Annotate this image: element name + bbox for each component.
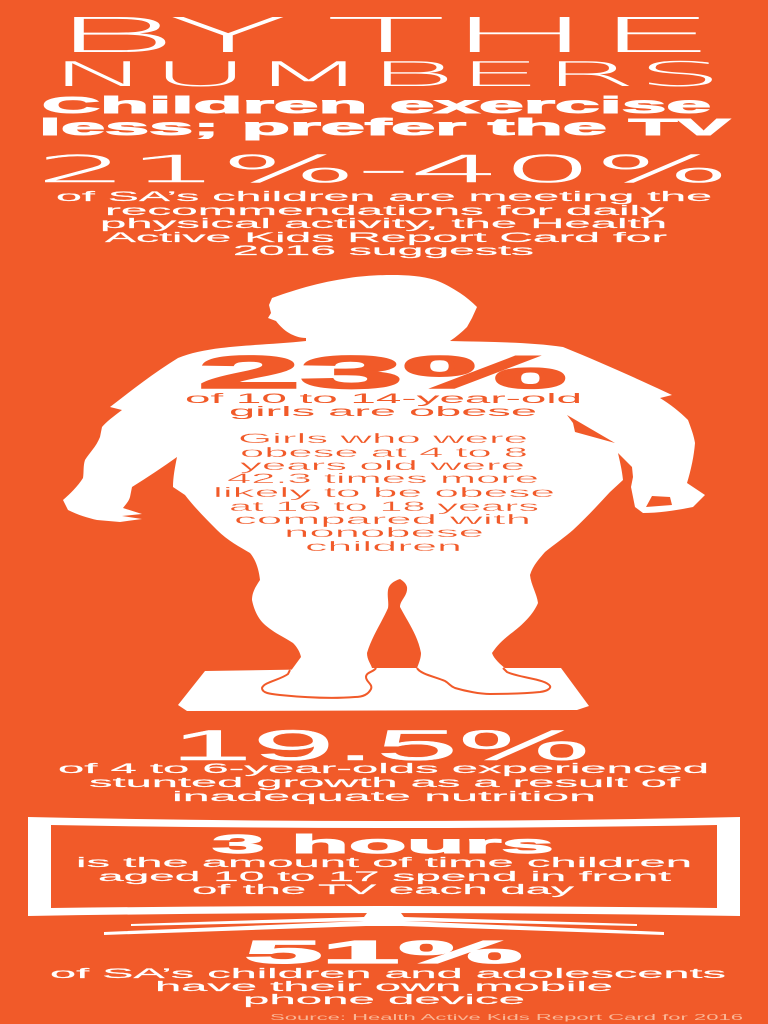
text block: likelihood of obesity: children <box>305 539 462 555</box>
icon: child silhouette on a scale <box>63 275 705 711</box>
scale platform <box>178 668 589 711</box>
text block: TV time: is the amount of time children <box>76 855 692 871</box>
title: By the Numbers: BY THE <box>50 8 718 64</box>
text block: TV time: aged 10 to 17 spend in front <box>98 869 671 885</box>
text block: likelihood of obesity: likely to be obese <box>213 485 555 501</box>
text block: mobile phones: have their own mobile <box>155 979 613 995</box>
text block: physical activity <box>56 189 712 259</box>
text block: likelihood of obesity: at 16 to 18 years <box>229 499 539 515</box>
text block: mobile phones: phone device <box>243 992 525 1008</box>
icon: television <box>28 817 740 935</box>
stat: 21%-40%: 21%-40% <box>36 148 731 191</box>
text block: likelihood of obesity: obese at 4 to 8 <box>240 445 528 461</box>
heading: Children exercise less: Children exercise <box>42 92 711 118</box>
right arm notches <box>567 415 672 507</box>
text block: stunted growth <box>58 761 709 805</box>
text block: likelihood of obesity: 42.3 times more <box>227 471 539 487</box>
text block: stunted growth: stunted growth as a result of <box>89 775 680 791</box>
text block: TV time <box>76 855 692 898</box>
TV stand <box>104 913 664 935</box>
text block: girls are obese: girls are obese <box>229 404 537 420</box>
title: By the Numbers <box>49 8 723 95</box>
heading: Children exercise less: less; prefer the TV <box>39 114 732 140</box>
text block: mobile phones <box>50 966 726 1008</box>
TV frame <box>28 817 740 916</box>
text block: physical activity: recommendations for daily <box>105 203 667 219</box>
child body <box>63 275 705 672</box>
text block: likelihood of obesity: compared with <box>234 512 531 528</box>
foot outlines <box>262 668 550 698</box>
stat: 51%: 51% <box>245 934 522 970</box>
text block: mobile phones: of SA’s children and adolescents <box>50 966 726 982</box>
title: By the Numbers: NUMBERS <box>49 55 723 95</box>
text block: likelihood of obesity: nonobese <box>284 525 484 541</box>
text block: physical activity: 2016 suggests <box>233 243 534 259</box>
source credit: Source: Health Active Kids Report Card for 2016 <box>270 1013 744 1022</box>
text block: physical activity: of SA’s children are meeting the <box>56 189 712 205</box>
text block: likelihood of obesity: years old were <box>240 458 525 474</box>
text block: stunted growth: of 4 to 6-year-olds experienced <box>58 761 709 777</box>
text block: TV time: of the TV each day <box>192 882 577 898</box>
text block: likelihood of obesity: Girls who were <box>238 431 528 447</box>
heading: Children exercise less <box>39 92 732 140</box>
gap between the legs <box>367 579 421 668</box>
text block: girls are obese: of 10 to 14-year-old <box>185 391 582 407</box>
text block: likelihood of obesity <box>213 431 555 555</box>
text block: stunted growth: inadequate nutrition <box>172 789 596 805</box>
text block: physical activity: Active Kids Report Card for <box>105 230 668 246</box>
stat: 3 hours: 3 hours <box>212 829 554 859</box>
text block: girls are obese <box>185 391 582 420</box>
stat: 19.5%: 19.5% <box>170 722 590 770</box>
text block: physical activity: physical activity, the Health <box>100 216 667 232</box>
stat: 23%: 23% <box>198 346 567 398</box>
